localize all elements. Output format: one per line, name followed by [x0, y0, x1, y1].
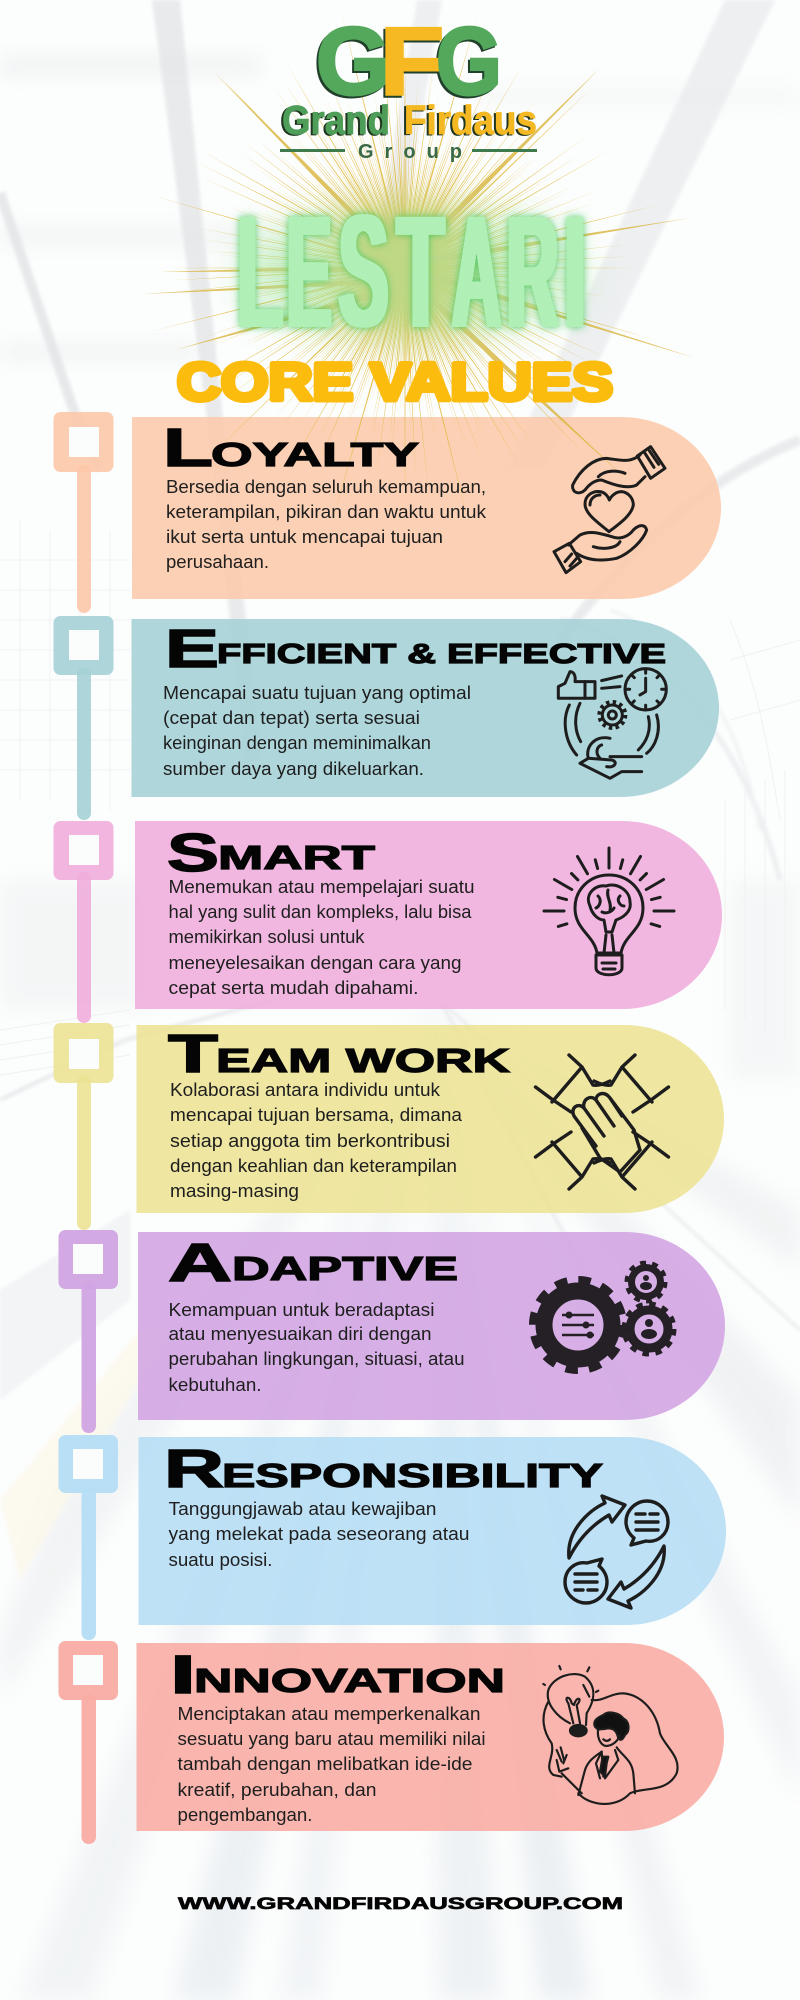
card	[136, 1643, 724, 1831]
description	[166, 477, 487, 572]
text: Innovation	[170, 1645, 505, 1825]
logo tagline: Group	[358, 141, 462, 163]
infographic canvas: I	[564, 182, 586, 361]
timeline connector	[54, 821, 114, 1023]
description: Mencapai suatu tujuan yang optimal	[163, 683, 471, 703]
subtitle: CORE VALUES: CORE VALUES	[177, 353, 613, 412]
timeline connector	[54, 616, 114, 820]
title: LESTARI: S	[338, 181, 388, 360]
heading: T	[168, 1024, 218, 1084]
title: LESTARI	[237, 181, 586, 361]
description: Kolaborasi antara individu untuk	[170, 1080, 441, 1100]
value row: Efficient and effective	[54, 616, 719, 820]
icon: hands holding heart	[554, 447, 665, 573]
description: kreatif, perubahan, dan	[178, 1780, 376, 1800]
value row: Team work	[54, 1023, 724, 1230]
description: (cepat dan tepat) serta sesuai	[163, 708, 420, 728]
value row: Innovation	[58, 1641, 724, 1844]
description: hal yang sulit dan kompleks, lalu bisa	[168, 902, 473, 922]
description: setiap anggota tim berkontribusi	[170, 1131, 450, 1151]
value row: Responsibility	[58, 1435, 726, 1640]
card	[132, 417, 721, 599]
title: LESTARI: L	[237, 182, 283, 361]
heading	[167, 823, 375, 883]
title: LESTARI: A	[452, 182, 501, 361]
timeline connector	[58, 1435, 118, 1640]
description: sesuatu yang baru atau memiliki nilai	[178, 1729, 486, 1749]
title: LESTARI: E	[286, 182, 332, 361]
heading: FFICIENT & EFFECTIVE	[217, 638, 666, 669]
description: ikut serta untuk mencapai tujuan	[166, 527, 443, 547]
description: perubahan lingkungan, situasi, atau	[168, 1349, 464, 1369]
icon: chat bubbles and cycle arrows	[565, 1496, 668, 1608]
logo wordmark: Grand	[282, 97, 390, 143]
logo: GFG Grand Firdaus Group	[280, 8, 537, 163]
heading: I	[170, 1645, 196, 1705]
heading	[163, 418, 419, 478]
card	[135, 821, 722, 1009]
description: cepat serta mudah dipahami.	[168, 978, 418, 998]
description: sumber daya yang dikeluarkan.	[163, 759, 424, 779]
description: keterampilan, pikiran dan waktu untuk	[166, 502, 487, 522]
description	[168, 1499, 470, 1570]
description: kebutuhan.	[168, 1375, 262, 1395]
description: meneyelesaikan dengan cara yang	[168, 953, 462, 973]
timeline connector	[54, 1023, 114, 1230]
heading: R	[164, 1439, 224, 1499]
description	[168, 1300, 464, 1395]
heading: L	[163, 418, 213, 478]
description: keinginan dengan meminimalkan	[163, 733, 431, 753]
description: Menciptakan atau memperkenalkan	[178, 1704, 480, 1724]
yellow starburst rays	[140, 3, 695, 533]
logo mark GFG: F	[380, 8, 444, 115]
description: mencapai tujuan bersama, dimana	[170, 1105, 463, 1125]
description	[168, 877, 474, 998]
description: Menemukan atau mempelajari suatu	[168, 877, 474, 897]
timeline connector	[58, 1230, 118, 1433]
timeline connector	[54, 412, 114, 613]
text: Adaptive	[168, 1233, 464, 1395]
icon: gears with people	[533, 1262, 674, 1370]
description: perusahaan.	[166, 552, 269, 572]
heading: S	[167, 823, 219, 883]
text: Smart	[167, 823, 474, 998]
heading	[170, 1645, 505, 1705]
description	[170, 1080, 463, 1201]
text: Team work	[168, 1024, 510, 1201]
description: Bersedia dengan seluruh kemampuan,	[166, 477, 486, 497]
card	[138, 1232, 725, 1420]
heading: MART	[218, 839, 375, 876]
soft green glow behind title	[242, 210, 582, 334]
heading: OYALTY	[211, 436, 419, 473]
title: LESTARI: T	[397, 182, 444, 361]
description: atau menyesuaikan diri dengan	[168, 1324, 432, 1344]
value row: Smart	[54, 821, 722, 1023]
value row: Loyalty	[54, 412, 721, 613]
value row: Adaptive	[58, 1230, 725, 1433]
heading: ESPONSIBILITY	[222, 1457, 603, 1494]
description: pengembangan.	[178, 1805, 312, 1825]
description: memikirkan solusi untuk	[168, 927, 366, 947]
description: masing-masing	[170, 1181, 299, 1201]
description: suatu posisi.	[168, 1550, 272, 1570]
heading: E	[165, 619, 219, 679]
icon: man with idea bulb	[543, 1666, 678, 1804]
heading	[168, 1233, 458, 1293]
description	[163, 683, 471, 779]
heading	[165, 619, 666, 679]
description: yang melekat pada seseorang atau	[168, 1524, 470, 1544]
description: tambah dengan melibatkan ide-ide	[178, 1754, 472, 1774]
card	[132, 619, 719, 797]
heading: A	[168, 1233, 232, 1293]
description: Tanggungjawab atau kewajiban	[168, 1499, 436, 1519]
icon: four hands together	[536, 1055, 668, 1189]
description: dengan keahlian dan keterampilan	[170, 1156, 457, 1176]
icon: efficiency thumb, clock, gear, hand	[558, 669, 666, 778]
text: Loyalty	[163, 418, 487, 572]
heading: EAM WORK	[216, 1042, 510, 1079]
logo mark GFG	[316, 8, 502, 115]
logo wordmark: Firdaus	[404, 97, 537, 143]
heading	[168, 1024, 510, 1084]
card	[138, 1437, 726, 1625]
text: Responsibility	[164, 1439, 603, 1570]
logo mark GFG: G	[436, 8, 502, 115]
timeline connector	[58, 1641, 118, 1844]
text: Efficient and effective	[163, 619, 666, 779]
heading	[164, 1439, 603, 1499]
description: Kemampuan untuk beradaptasi	[168, 1300, 434, 1320]
logo mark GFG: G	[316, 8, 390, 115]
logo wordmark	[282, 97, 537, 143]
heading: NNOVATION	[194, 1662, 505, 1699]
title: LESTARI: R	[506, 182, 558, 361]
heading: DAPTIVE	[232, 1250, 458, 1287]
description	[178, 1704, 486, 1825]
card	[136, 1025, 724, 1213]
footer: website: WWW.GRANDFIRDAUSGROUP.COM	[178, 1895, 623, 1913]
icon: light bulb with brain	[544, 848, 674, 975]
